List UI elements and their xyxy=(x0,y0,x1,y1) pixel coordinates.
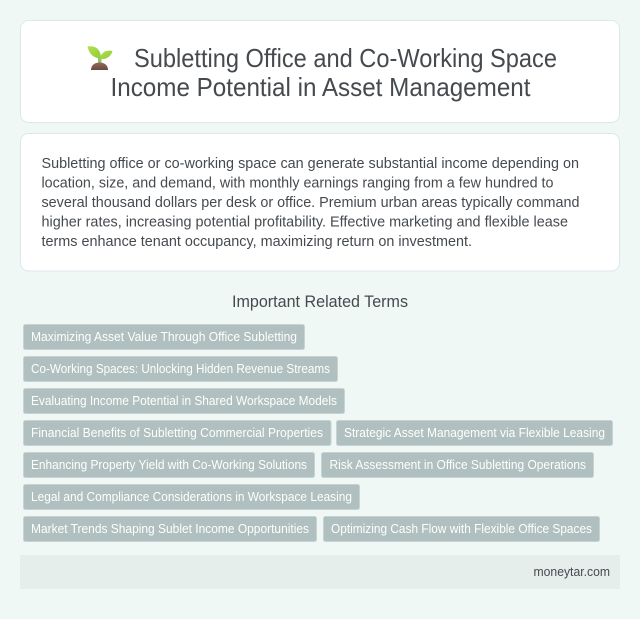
chip xyxy=(24,388,344,414)
chip: Risk Assessment in Office Subletting Operations xyxy=(330,458,586,472)
chip: Optimizing Cash Flow with Flexible Office Spaces xyxy=(331,522,592,536)
title: Income Potential in Asset Management xyxy=(110,72,531,102)
footer site name: moneytar.com xyxy=(534,565,610,579)
chip xyxy=(324,516,600,542)
chip: Strategic Asset Management via Flexible Leasing xyxy=(344,426,605,440)
chip xyxy=(24,420,331,446)
chip xyxy=(336,420,612,446)
title xyxy=(110,43,557,102)
chip xyxy=(24,516,316,542)
chip: Enhancing Property Yield with Co-Working Solutions xyxy=(31,458,307,472)
description text: several thousand dollars per desk or office. Premium urban areas typically command xyxy=(42,194,580,211)
chip: Market Trends Shaping Sublet Income Opportunities xyxy=(31,522,309,536)
footer xyxy=(20,555,620,589)
chip: Co-Working Spaces: Unlocking Hidden Revenue Streams xyxy=(31,362,330,376)
chip xyxy=(322,452,594,478)
panel: description card xyxy=(20,134,620,271)
chip xyxy=(24,356,338,382)
description text: Subletting office or co-working space can generate substantial income depending on xyxy=(42,155,579,172)
description text: location, size, and demand, with monthly earnings ranging from a few hundred to xyxy=(42,174,554,192)
description text xyxy=(42,155,580,250)
chip: Legal and Compliance Considerations in Workspace Leasing xyxy=(31,490,352,504)
chip: Evaluating Income Potential in Shared Workspace Models xyxy=(31,394,337,408)
heading: related terms: Important Related Terms xyxy=(232,293,408,311)
description text: higher rates, increasing potential profitability. Effective marketing and flexible lease xyxy=(42,214,568,230)
description text: terms enhance tenant occupancy, maximizing return on investment. xyxy=(42,233,472,250)
panel: title card xyxy=(20,20,620,122)
panel: related term chips xyxy=(24,324,612,542)
chip: Financial Benefits of Subletting Commercial Properties xyxy=(31,426,323,440)
chip: Maximizing Asset Value Through Office Subletting xyxy=(31,330,297,344)
icon: seedling xyxy=(88,46,112,70)
chip xyxy=(24,324,304,350)
title: Subletting Office and Co-Working Space xyxy=(134,43,557,73)
chip xyxy=(24,484,360,510)
chip xyxy=(24,452,314,478)
